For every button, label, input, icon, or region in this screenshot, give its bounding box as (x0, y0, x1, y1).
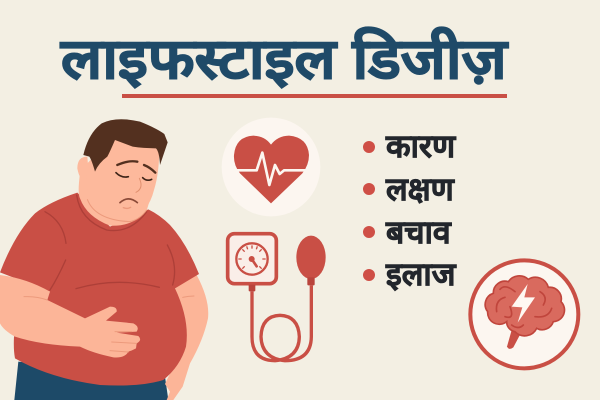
gauge dial (236, 243, 268, 275)
ECG line (235, 153, 307, 185)
hair (83, 119, 168, 172)
icon: heart with ECG (222, 118, 320, 216)
list item: symptoms: लक्षण (386, 171, 454, 207)
title: लाइफस्टाइल डिजीज़ (61, 27, 507, 90)
monitor box (228, 234, 276, 284)
shirt fold lines (45, 195, 175, 290)
brain (485, 276, 565, 336)
tube (252, 285, 311, 361)
list bullets (363, 141, 375, 281)
pants (14, 362, 168, 400)
face (86, 133, 159, 222)
list item: treatment: इलाज (386, 256, 455, 292)
heart backdrop circle (222, 118, 320, 216)
heart (234, 136, 309, 203)
brain folds (496, 287, 552, 327)
connector (249, 285, 255, 291)
icon: brain with lightning in circle (470, 260, 578, 368)
brain circle (470, 260, 578, 368)
lightning bolt (512, 284, 535, 323)
brain stem (507, 330, 522, 349)
bulb (296, 236, 326, 279)
shirt (0, 193, 199, 386)
list item: prevention: बचाव (386, 214, 451, 250)
double chin line (87, 199, 147, 222)
facial features (116, 161, 155, 208)
ear (77, 157, 89, 182)
title underline (122, 94, 507, 98)
hand and arm creases (24, 296, 194, 352)
gauge needle (251, 258, 257, 266)
list item: causes: कारण (386, 128, 455, 164)
left arm (0, 275, 140, 357)
icon: blood pressure monitor (228, 234, 326, 361)
neck and chin (79, 173, 157, 226)
figure: overweight man holding belly (0, 119, 208, 400)
right arm and hand (165, 275, 208, 400)
